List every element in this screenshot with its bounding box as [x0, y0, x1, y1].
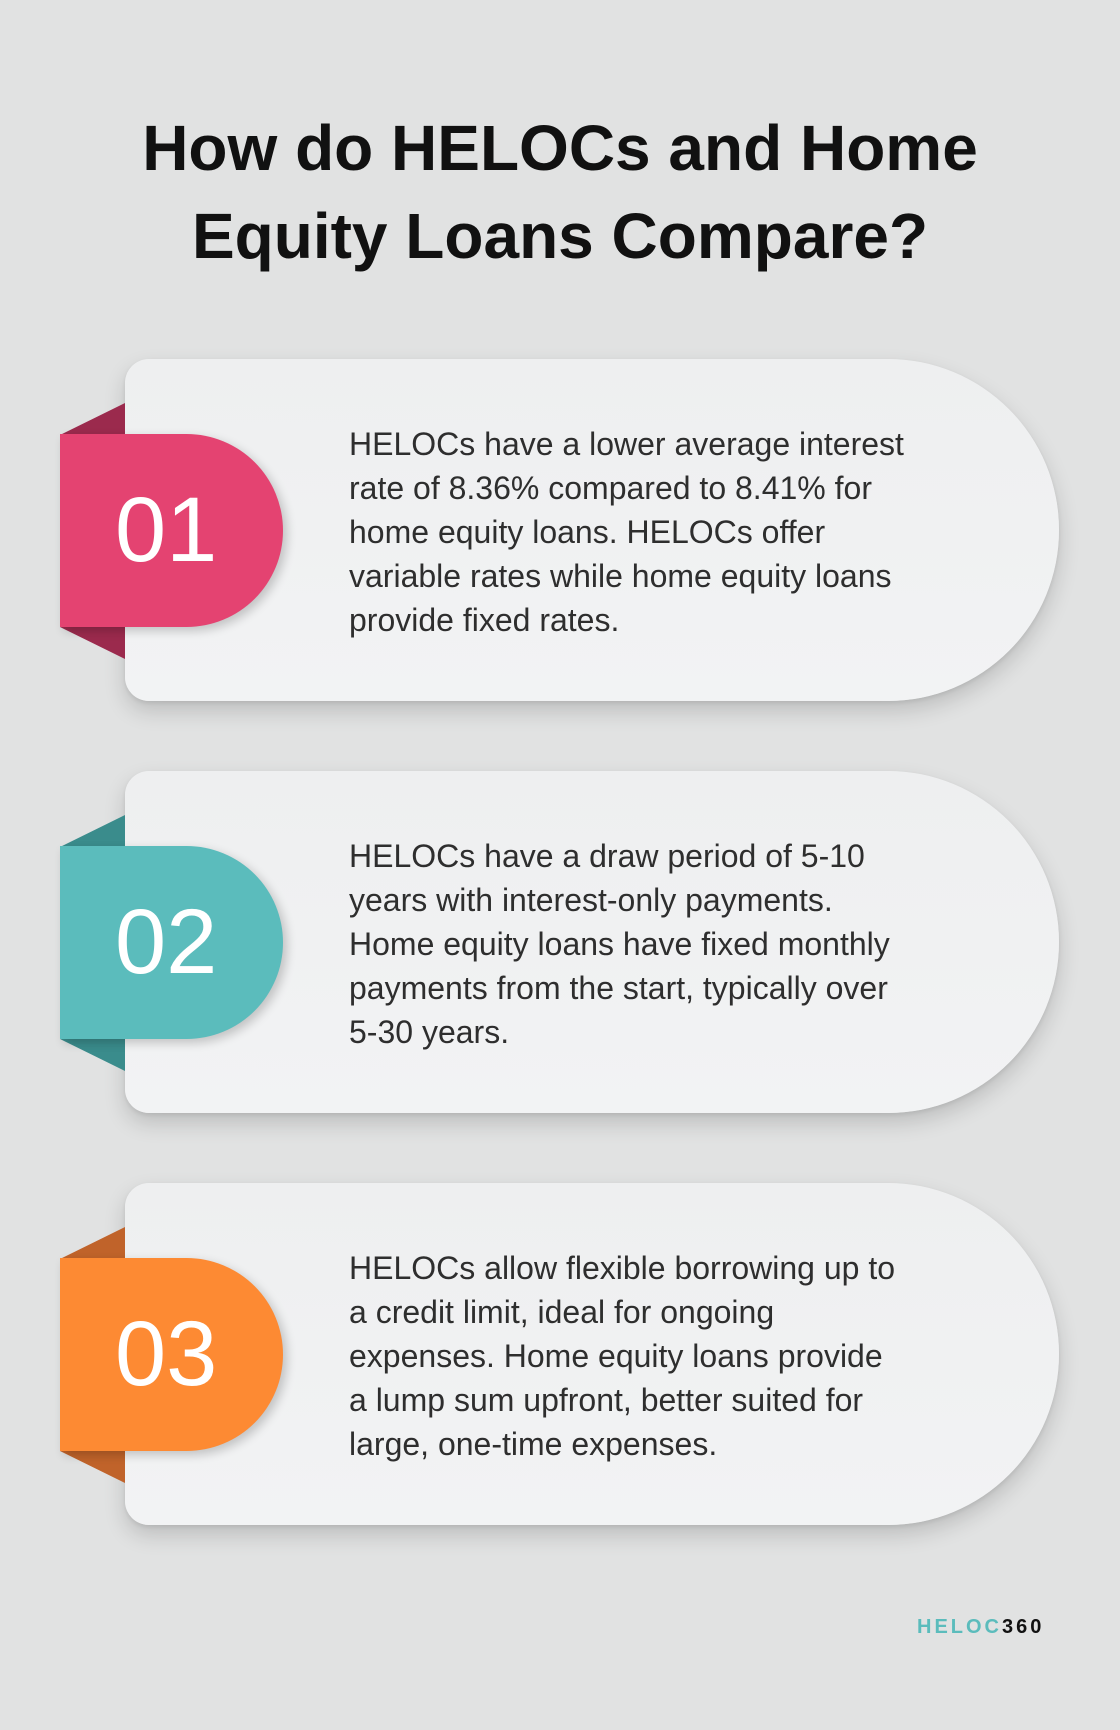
- card 2: [125, 771, 1059, 1113]
- fold bottom 1: [60, 627, 125, 659]
- text 1: provide fixed rates.: [349, 602, 619, 638]
- text 2: 5-30 years.: [349, 1014, 509, 1050]
- text 2: years with interest-only payments.: [349, 882, 833, 918]
- fold top 2: [62, 815, 125, 846]
- text 3: expenses. Home equity loans provide: [349, 1338, 883, 1374]
- fold bottom 2: [60, 1039, 125, 1071]
- text 3: [349, 1250, 895, 1462]
- title: How do HELOCs and Home: [142, 112, 978, 184]
- panel: item 1: [60, 359, 1066, 718]
- title: [142, 112, 978, 272]
- number tab 02: [60, 846, 283, 1039]
- number tab 02: 02: [115, 891, 217, 993]
- number tab 03: 03: [115, 1303, 217, 1405]
- logo: HELOC360: [917, 1616, 1044, 1638]
- number tab 01: 01: [115, 479, 217, 581]
- text 3: a lump sum upfront, better suited for: [349, 1382, 863, 1418]
- number tab 01: [60, 434, 283, 627]
- text 2: HELOCs have a draw period of 5-10: [349, 838, 865, 874]
- number tab 03: [60, 1258, 283, 1451]
- panel: item 3: [60, 1183, 1066, 1542]
- text 1: variable rates while home equity loans: [349, 558, 892, 594]
- panel: item 2: [60, 771, 1066, 1130]
- fold top 1: [62, 403, 125, 434]
- text 1: rate of 8.36% compared to 8.41% for: [349, 470, 872, 506]
- text 1: [349, 426, 904, 638]
- text 3: a credit limit, ideal for ongoing: [349, 1294, 774, 1330]
- text 3: HELOCs allow flexible borrowing up to: [349, 1250, 895, 1286]
- text 2: [349, 838, 890, 1050]
- text 2: payments from the start, typically over: [349, 970, 888, 1006]
- card 3: [125, 1183, 1059, 1525]
- title: Equity Loans Compare?: [192, 200, 928, 272]
- fold top 3: [62, 1227, 125, 1258]
- card 1: [125, 359, 1059, 701]
- text 1: HELOCs have a lower average interest: [349, 426, 904, 462]
- text 1: home equity loans. HELOCs offer: [349, 514, 825, 550]
- fold bottom 3: [60, 1451, 125, 1483]
- text 3: large, one-time expenses.: [349, 1426, 717, 1462]
- text 2: Home equity loans have fixed monthly: [349, 926, 890, 962]
